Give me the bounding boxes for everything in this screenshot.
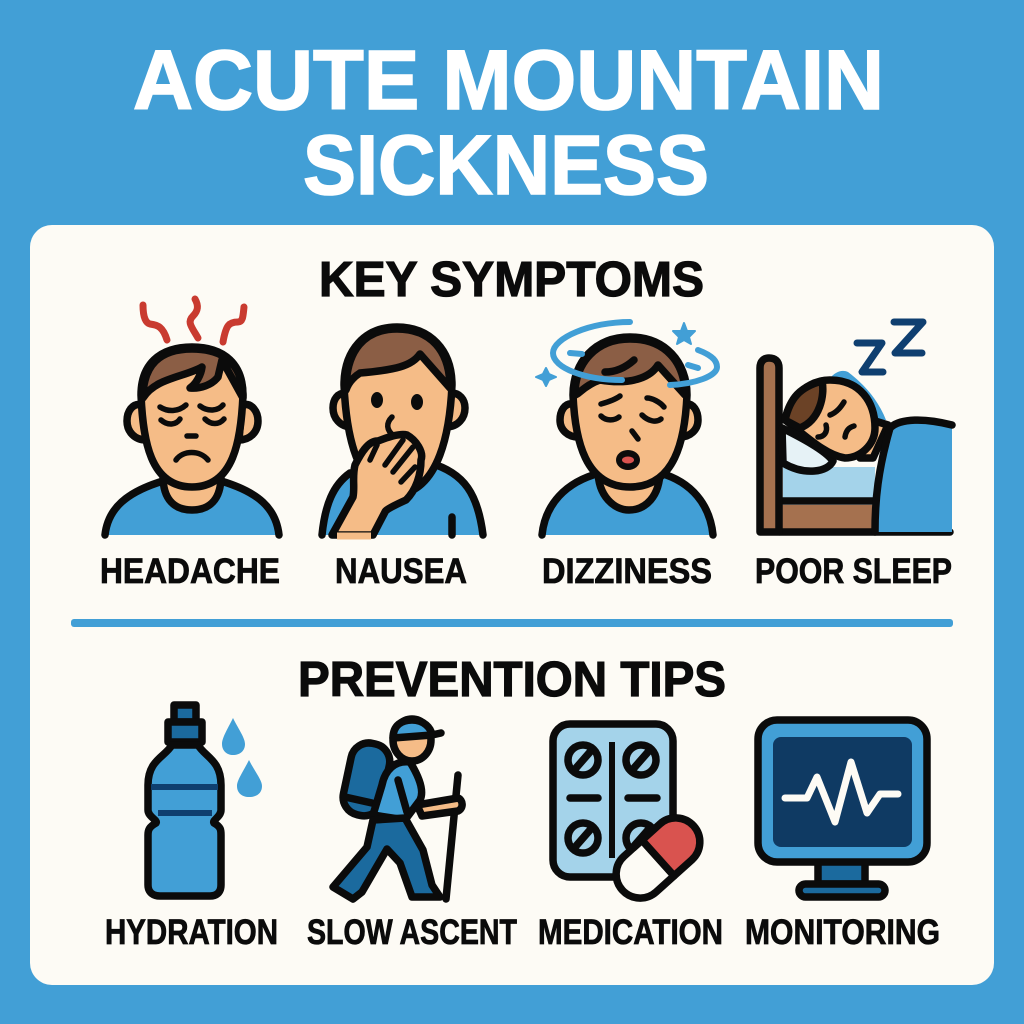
label: medication: MEDICATION [538, 913, 723, 952]
label: hydration: HYDRATION [105, 913, 278, 952]
heading: key symptoms: KEY SYMPTOMS [319, 253, 704, 307]
title: ACUTE MOUNTAIN [133, 33, 884, 127]
icon: headache [105, 299, 279, 535]
icon: dizziness [536, 322, 717, 535]
label: nausea: NAUSEA [335, 552, 467, 591]
label: monitoring: MONITORING [745, 913, 940, 952]
icon: medication [553, 724, 710, 908]
icon: water bottle [148, 705, 262, 896]
icon: hiker [333, 719, 462, 899]
label: headache: HEADACHE [100, 552, 280, 591]
title [133, 33, 884, 212]
icon: poor sleep [760, 322, 952, 532]
title: SICKNESS [303, 118, 709, 212]
label: poor sleep: POOR SLEEP [755, 552, 952, 591]
label: slow ascent: SLOW ASCENT [307, 913, 517, 952]
label: dizziness: DIZZINESS [542, 552, 712, 591]
heading: prevention tips: PREVENTION TIPS [298, 653, 726, 707]
panel: main card [30, 225, 994, 985]
icon: nausea [322, 327, 483, 536]
icon: monitor [758, 720, 927, 897]
